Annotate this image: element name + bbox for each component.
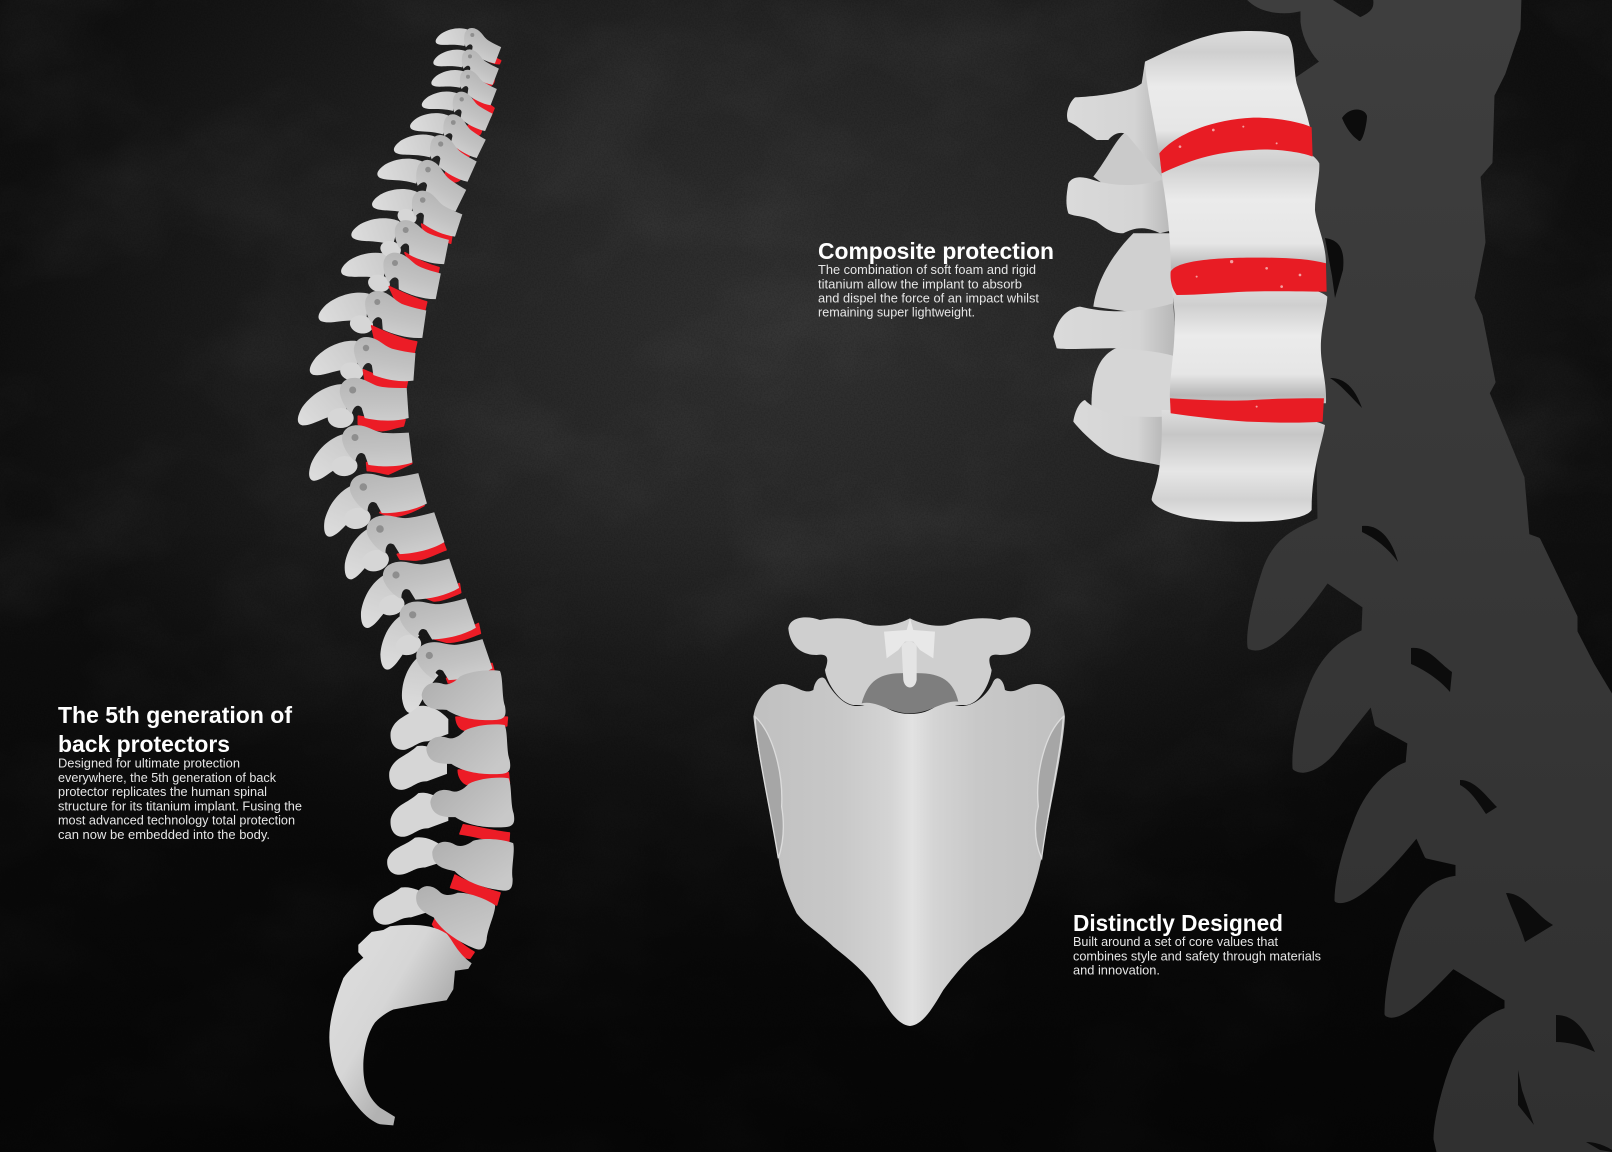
lamina and spinous crest [884, 618, 935, 658]
heading [58, 702, 292, 757]
body [58, 756, 302, 842]
heading: Composite protection [818, 238, 1054, 264]
heading: The 5th generation of [58, 702, 292, 728]
vertebra pivot dots [349, 33, 474, 659]
text block: the 5th generation [58, 702, 302, 842]
body: and innovation. [1073, 964, 1160, 978]
transverse processes [1053, 62, 1177, 467]
body: structure for its titanium implant. Fusing the [58, 800, 302, 814]
heading: Distinctly Designed [1073, 910, 1283, 936]
central opening [862, 673, 958, 713]
body: Designed for ultimate protection [58, 756, 240, 770]
body [1073, 935, 1321, 978]
close-up of lumbar vertebrae with red discs [1053, 31, 1327, 522]
text block: distinctly designed [1073, 910, 1321, 978]
sacrum front view [753, 617, 1065, 1026]
left spine: full spinal column [297, 19, 519, 1125]
body: protector replicates the human spinal [58, 785, 267, 799]
thoracic vertebra bodies [340, 25, 505, 689]
body: remaining super lightweight. [818, 306, 975, 320]
heading: back protectors [58, 731, 230, 757]
vertebral bodies [1145, 31, 1312, 163]
body: everywhere, the 5th generation of back [58, 771, 277, 785]
red discs [1159, 118, 1327, 423]
sacrum and coccyx side view [329, 925, 472, 1125]
top vertebra with wings [788, 617, 1031, 705]
body: most advanced technology total protection [58, 814, 295, 828]
body: combines style and safety through materials [1073, 950, 1321, 964]
body: titanium allow the implant to absorb [818, 278, 1022, 292]
silhouette gaps [1325, 110, 1612, 1152]
body: The combination of soft foam and rigid [818, 263, 1036, 277]
thoracic spinous processes [297, 19, 471, 715]
body [818, 263, 1040, 320]
thoracic red discs [358, 51, 501, 560]
body: and dispel the force of an impact whilst [818, 292, 1040, 306]
body: Built around a set of core values that [1073, 935, 1279, 949]
text block: composite protection [818, 238, 1054, 320]
side wings [755, 717, 1063, 858]
disc flecks [1179, 126, 1301, 408]
body: can now be embedded into the body. [58, 828, 270, 842]
articular processes [1091, 132, 1177, 423]
lumbar and lower discs [424, 584, 509, 958]
lumbar processes [373, 706, 448, 925]
sacrum body [753, 678, 1065, 1026]
spine silhouette on the right [1247, 0, 1612, 1152]
lumbar vertebra bodies [408, 670, 519, 953]
